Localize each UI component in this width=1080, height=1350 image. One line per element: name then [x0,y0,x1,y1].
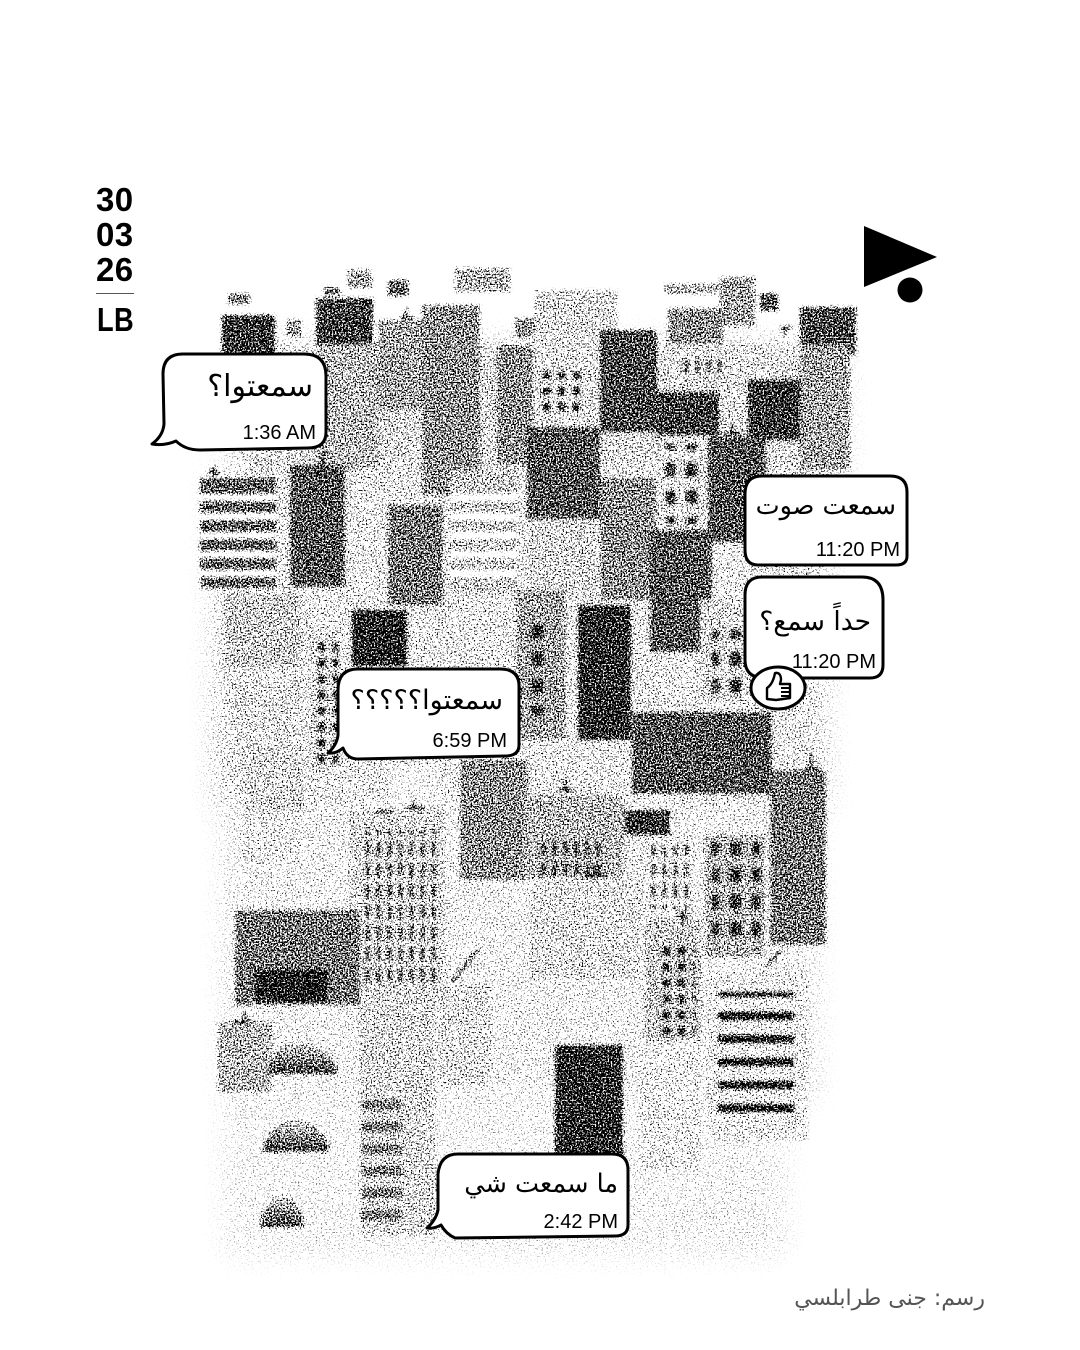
chat bubble: 2:42 PM: 2:42 PM [544,1211,618,1233]
date stamp: 30 [96,181,134,218]
chat bubble: 1:36 AM [152,354,326,450]
chat bubble: 2:42 PM: ما سمعت شي [464,1169,618,1199]
upper tower row [318,305,850,545]
chat bubble: 1:36 AM: 1:36 AM [243,422,316,444]
rooftops skyline [222,268,856,357]
chat bubble: 1:36 AM: سمعتوا؟ [207,369,313,404]
chat bubble: 11:20 PM upper: 11:20 PM [816,539,900,561]
date stamp [96,181,134,338]
chat bubble: 11:20 PM upper [745,476,907,565]
bottom tower row [218,970,808,1235]
logo: triangle and dot [864,226,937,302]
chat bubble: 6:59 PM: 6:59 PM [433,730,507,752]
chat bubble: 6:59 PM: سمعتوا؟؟؟؟؟ [350,685,503,716]
lower tower row [235,760,765,1042]
chat bubble: 6:59 PM [328,669,519,759]
date stamp: 26 [96,251,134,288]
reaction: thumbs up [751,667,805,709]
rooftop antennas [208,287,820,1022]
chat bubble: 11:20 PM upper: سمعت صوت [756,491,896,521]
chat bubble: 11:20 PM lower: حداً سمع؟ [759,602,871,637]
date stamp: 03 [96,216,134,253]
chat bubble: 2:42 PM [427,1154,628,1238]
illustrator credit: رسم: جنى طرابلسي [794,1286,985,1311]
date stamp: LB [97,301,134,338]
grain haze behind the city [215,345,840,1255]
chat bubble: 11:20 PM lower: 11:20 PM [792,651,876,673]
chat bubble: 11:20 PM lower [745,577,883,678]
middle tower row [200,465,826,945]
